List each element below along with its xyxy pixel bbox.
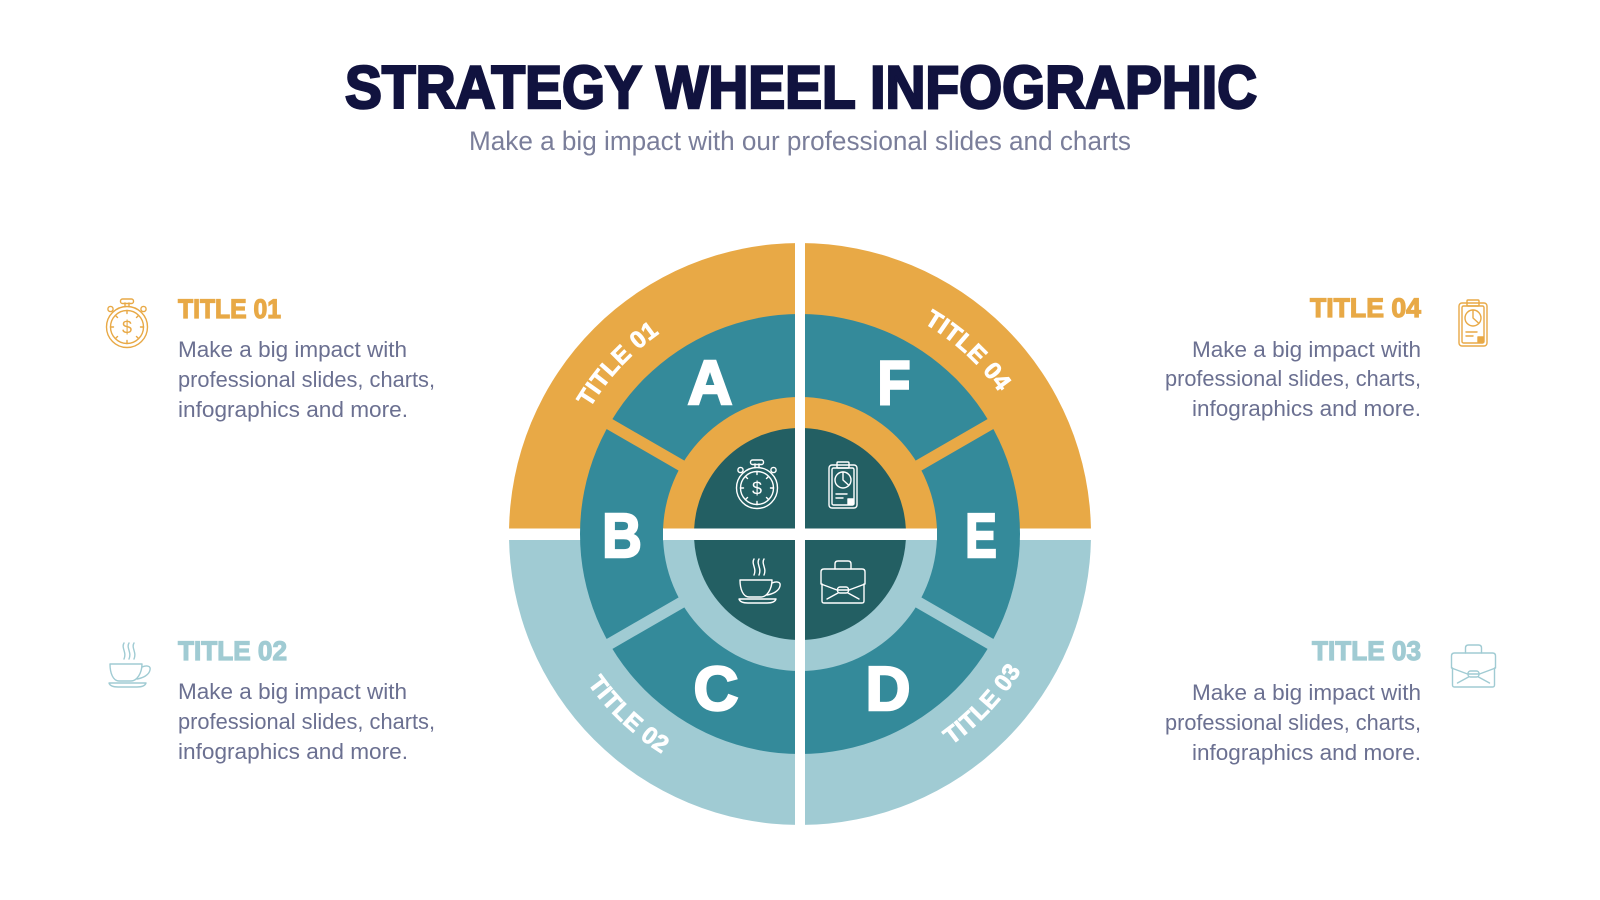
- icon: hub coffee cup: [739, 559, 780, 603]
- infographic canvas: [106, 64, 1496, 825]
- dark hub: [694, 428, 906, 640]
- text block: [178, 679, 435, 764]
- icon: coffee cup: [109, 643, 150, 687]
- text block: professional slides, charts,: [178, 709, 435, 734]
- subtitle: Make a big impact with our professional slides and charts: [469, 126, 1131, 156]
- title: STRATEGY WHEEL INFOGRAPHIC: [345, 54, 1257, 121]
- heading: TITLE 04: [1310, 293, 1421, 323]
- icon: hub stopwatch: $: [752, 478, 762, 498]
- segment letter F: F: [878, 349, 910, 418]
- icon: hub clipboard: [829, 462, 857, 508]
- arc label: title 02: TITLE 02: [590, 673, 669, 754]
- panel: title 03: [1165, 636, 1496, 765]
- panel: title 04: [1165, 293, 1487, 421]
- teal segment ring: [580, 314, 1020, 754]
- text block: Make a big impact with: [1192, 337, 1421, 362]
- vertical divider: [795, 236, 805, 836]
- text block: Make a big impact with: [178, 679, 407, 704]
- arc label: title 04: TITLE 04: [928, 308, 1012, 391]
- text block: infographics and more.: [1192, 740, 1421, 765]
- text block: [178, 337, 435, 422]
- icon: hub stopwatch: [736, 460, 778, 508]
- text block: infographics and more.: [178, 739, 408, 764]
- arc label: title 03: TITLE 03: [941, 664, 1020, 742]
- heading: TITLE 03: [1312, 636, 1421, 666]
- segment letter B: B: [602, 502, 642, 571]
- icon: stopwatch: $: [122, 318, 132, 338]
- segment letter E: E: [965, 502, 997, 571]
- text block: infographics and more.: [1192, 396, 1421, 421]
- text block: [1165, 337, 1421, 421]
- text block: Make a big impact with: [178, 337, 407, 362]
- text block: Make a big impact with: [1192, 680, 1421, 705]
- segment spokes: [608, 423, 992, 645]
- icon: hub briefcase: [821, 561, 865, 603]
- heading: TITLE 01: [178, 294, 281, 324]
- strategy wheel: [509, 243, 1091, 825]
- text block: infographics and more.: [178, 397, 408, 422]
- heading: TITLE 02: [178, 636, 287, 666]
- inner ring: [663, 397, 937, 671]
- panel: title 01: [106, 294, 435, 422]
- text block: professional slides, charts,: [1165, 366, 1421, 391]
- outer ring: orange and light quadrants: [509, 243, 1091, 825]
- arc label: title 01: TITLE 01: [576, 322, 660, 404]
- segment letter D: D: [866, 655, 910, 724]
- text block: [1165, 680, 1421, 765]
- icon: clipboard: [1459, 300, 1487, 346]
- text block: professional slides, charts,: [178, 367, 435, 392]
- segment letter A: A: [688, 349, 732, 418]
- panel: title 02: [109, 636, 435, 764]
- icon: briefcase: [1452, 645, 1496, 687]
- icon: stopwatch: [106, 299, 148, 348]
- segment letter C: C: [694, 655, 738, 724]
- text block: professional slides, charts,: [1165, 710, 1421, 735]
